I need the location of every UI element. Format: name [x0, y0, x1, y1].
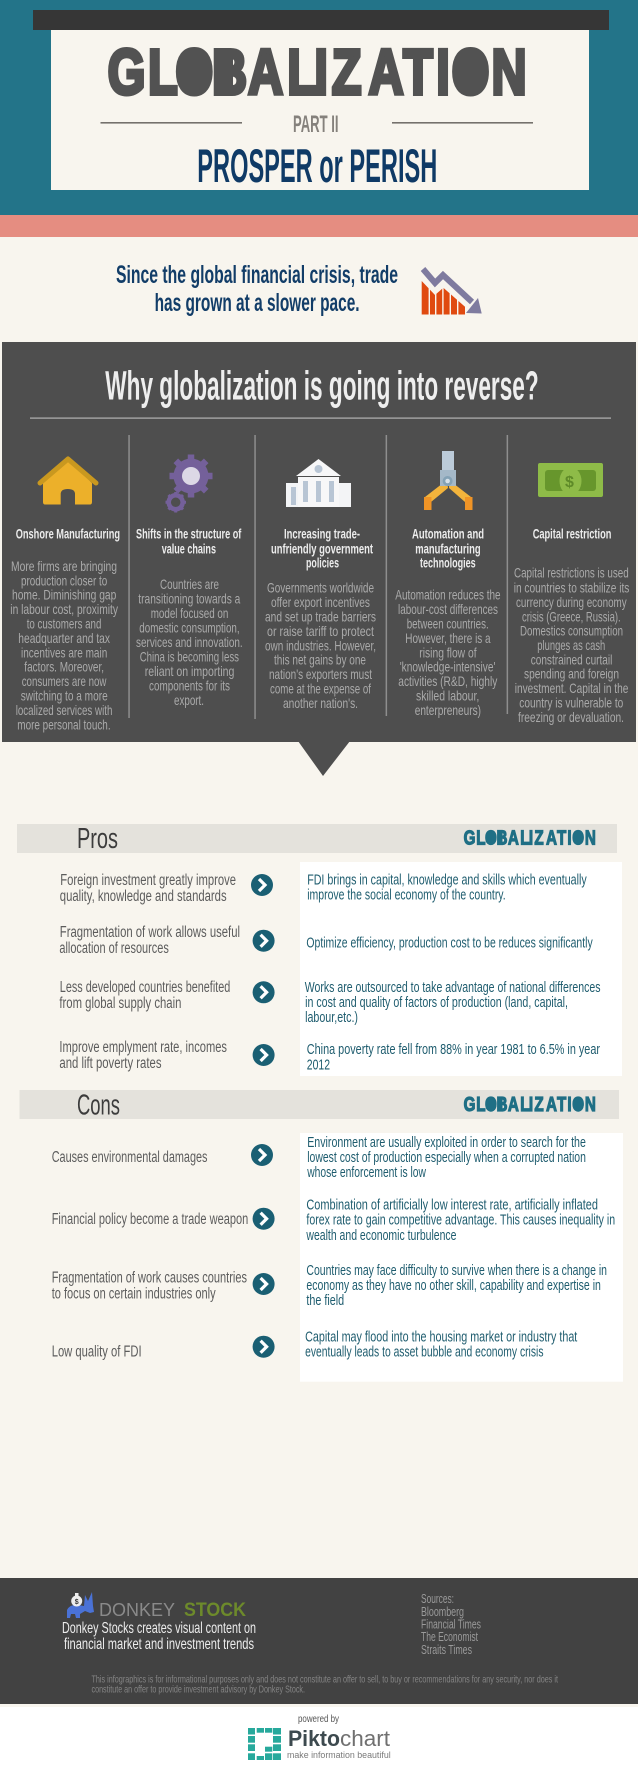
column: trade policies: [265, 526, 376, 711]
column: onshore manufacturing: factors. Moreover,: [24, 659, 104, 675]
column: automation: enterpreneurs): [415, 702, 481, 718]
list: cons statements: [52, 1149, 248, 1360]
column: automation: rising flow of: [419, 644, 477, 660]
icon: donkey logo: [67, 1592, 94, 1618]
column: automation: between countries.: [407, 616, 489, 632]
column: onshore manufacturing: [10, 526, 120, 733]
list: pros statements: Fragmentation of work allows useful: [60, 924, 240, 941]
column: automation: technologies: [420, 555, 476, 571]
column: onshore manufacturing: localized services with: [16, 702, 112, 718]
panel: why globalization is going into reverse: [2, 342, 636, 776]
column: value chains: Shifts in the structure of: [136, 526, 242, 542]
icon: cons arrow 1: [251, 1144, 273, 1166]
statement: slower trade: has grown at a slower pace.: [155, 289, 360, 317]
column: automation: Automation reduces the: [395, 587, 501, 603]
column: trade policies: and set up trade barriers: [265, 608, 376, 624]
column: automation: 'knowledge-intensive': [400, 659, 495, 675]
column: trade policies: nation's exporters must: [269, 666, 372, 682]
brand name: STOCK: [184, 1600, 246, 1621]
title: GLOBALIZATION: [108, 38, 527, 109]
footer panel: [0, 1578, 638, 1704]
column: onshore manufacturing: more personal touch.: [17, 717, 111, 733]
column: onshore manufacturing: consumers are now: [22, 673, 107, 689]
list: pros statements: and lift poverty rates: [59, 1055, 162, 1072]
list: pros statements: Improve emplyment rate, incomes: [59, 1039, 227, 1056]
disclaimer: constitute an offer to provide investment advisory by Donkey Stock.: [92, 1684, 305, 1696]
brand description: financial market and investment trends: [64, 1636, 254, 1653]
attribution strip: [0, 1707, 638, 1770]
column: capital restriction: [514, 526, 629, 725]
icon: donkey logo: $: [75, 1599, 79, 1606]
column: automation: However, there is a: [405, 630, 491, 646]
brand description: Donkey Stocks creates visual content on: [62, 1620, 256, 1637]
statement: slower trade: Since the global financial crisis, trade: [116, 261, 398, 289]
icon: pros arrow 2: [253, 930, 275, 952]
disclaimer: [92, 1674, 558, 1696]
column: automation: labour-cost differences: [398, 601, 498, 617]
column: value chains: value chains: [162, 540, 216, 556]
icon: house: [40, 459, 96, 504]
icon: cons arrow 3: [253, 1273, 275, 1295]
brand name: [99, 1599, 246, 1621]
column: automation: activities (R&D, highly: [398, 673, 497, 689]
column: onshore manufacturing: production closer to: [21, 572, 107, 588]
section header: pros: [17, 823, 617, 855]
icon: robotic claw: [424, 451, 472, 510]
list: cons statements: Financial policy become a trade weapon: [52, 1211, 248, 1228]
column: trade policies: or raise tariff to protect: [267, 623, 374, 639]
column: trade policies: policies: [306, 555, 339, 571]
icon: piktochart mark: [248, 1728, 281, 1760]
icon: gears: [166, 454, 212, 512]
list: pros statements: Less developed countries benefited: [60, 979, 230, 996]
column: value chains: China is becoming less: [140, 648, 239, 664]
column: trade policies: another nation's.: [283, 695, 358, 711]
icon: banknote: [538, 463, 603, 497]
column: automation: [395, 526, 501, 718]
column: automation: manufacturing: [415, 540, 481, 556]
column: onshore manufacturing: to customers and: [27, 615, 101, 631]
column: capital restriction: plunges as cash: [537, 637, 605, 653]
sources list: Bloomberg: [421, 1604, 464, 1619]
list: cons statements: Fragmentation of work causes countries: [52, 1270, 247, 1287]
column: value chains: components for its: [149, 677, 230, 693]
panel: cons explanations: [300, 1133, 623, 1382]
piktochart wordmark: chart: [340, 1726, 391, 1751]
statement: slower trade: [116, 261, 398, 317]
section header: cons: [20, 1089, 619, 1121]
column: value chains: Countries are: [160, 576, 219, 592]
icon: pros arrow 4: [253, 1044, 275, 1066]
column: value chains: services and innovation.: [136, 634, 243, 650]
column: automation: skilled labour,: [416, 688, 479, 704]
icon: banknote: $: [565, 474, 574, 491]
list: cons statements: Causes environmental damages: [52, 1149, 208, 1166]
piktochart wordmark: Pikto: [288, 1726, 340, 1751]
column: onshore manufacturing: switching to a more: [21, 688, 108, 704]
panel: cons explanations: wealth and economic turbulence: [306, 1227, 456, 1244]
icon: falling chart: [422, 269, 482, 315]
column: onshore manufacturing: Onshore Manufacturing: [16, 526, 120, 542]
column: value chains: export.: [174, 692, 204, 708]
column: trade policies: offer export incentives: [271, 594, 370, 610]
column: trade policies: this net gains by one: [274, 652, 366, 668]
section header: pros: GLOBALIZATION: [464, 826, 596, 849]
column: value chains: domestic consumption,: [139, 620, 240, 636]
column: onshore manufacturing: incentives are main: [21, 644, 107, 660]
column: value chains: model focused on: [151, 605, 228, 621]
column: value chains: reliant on importing: [145, 663, 234, 679]
column: trade policies: unfriendly government: [271, 540, 373, 556]
icon: cons arrow 2: [253, 1208, 275, 1230]
panel: cons explanations: whose enforcement is low: [307, 1164, 426, 1181]
list: pros statements: allocation of resources: [59, 940, 169, 957]
sources list: Financial Times: [421, 1617, 481, 1632]
sources list: [421, 1591, 481, 1657]
brand description: [62, 1620, 256, 1653]
icon: cons arrow 4: [253, 1336, 275, 1358]
sources list: The Economist: [421, 1629, 478, 1644]
icon: government building: [286, 459, 351, 507]
list: pros statements: [59, 872, 240, 1072]
list: cons statements: to focus on certain industries only: [52, 1286, 216, 1303]
piktochart wordmark: [287, 1726, 391, 1760]
column: value chains: [136, 526, 243, 708]
icon: pros arrow 3: [253, 981, 275, 1003]
column: trade policies: come at the expense of: [270, 681, 371, 697]
list: cons statements: Low quality of FDI: [52, 1343, 142, 1360]
column: onshore manufacturing: headquarter and tax: [18, 630, 110, 646]
piktochart wordmark: make information beautiful: [287, 1750, 391, 1760]
powered by: powered by: [298, 1714, 339, 1725]
icon: pros arrow 1: [251, 874, 273, 896]
panel: pros explanations: 2012: [307, 1056, 330, 1073]
column: onshore manufacturing: in labour cost, proximity: [10, 601, 118, 617]
panel: pros explanations: improve the social economy of the country.: [307, 887, 506, 904]
panel: pros explanations: labour,etc.): [305, 1009, 358, 1026]
section header: cons: GLOBALIZATION: [464, 1093, 596, 1116]
list: pros statements: from global supply chain: [59, 995, 181, 1012]
panel: pros explanations: [300, 862, 622, 1076]
column: onshore manufacturing: home. Diminishing gap: [12, 587, 116, 603]
sources list: Straits Times: [421, 1642, 472, 1657]
column: trade policies: Increasing trade-: [284, 526, 360, 542]
column: value chains: transitioning towards a: [138, 591, 240, 607]
section header: pros: Pros: [77, 823, 118, 855]
header band: [0, 0, 638, 237]
subtitle: part II: PART II: [293, 111, 338, 138]
column: automation: Automation and: [412, 526, 484, 542]
column: onshore manufacturing: More firms are bringing: [11, 558, 117, 574]
panel: cons explanations: the field: [306, 1292, 344, 1309]
column: trade policies: Governments worldwide: [267, 579, 374, 595]
list: pros statements: Foreign investment greatly improve: [60, 872, 236, 889]
sources list: Sources:: [421, 1591, 454, 1606]
brand name: DONKEY: [99, 1599, 175, 1620]
section header: cons: Cons: [77, 1089, 120, 1121]
column: trade policies: own industries. However,: [265, 637, 376, 653]
list: pros statements: quality, knowledge and standards: [60, 888, 227, 905]
